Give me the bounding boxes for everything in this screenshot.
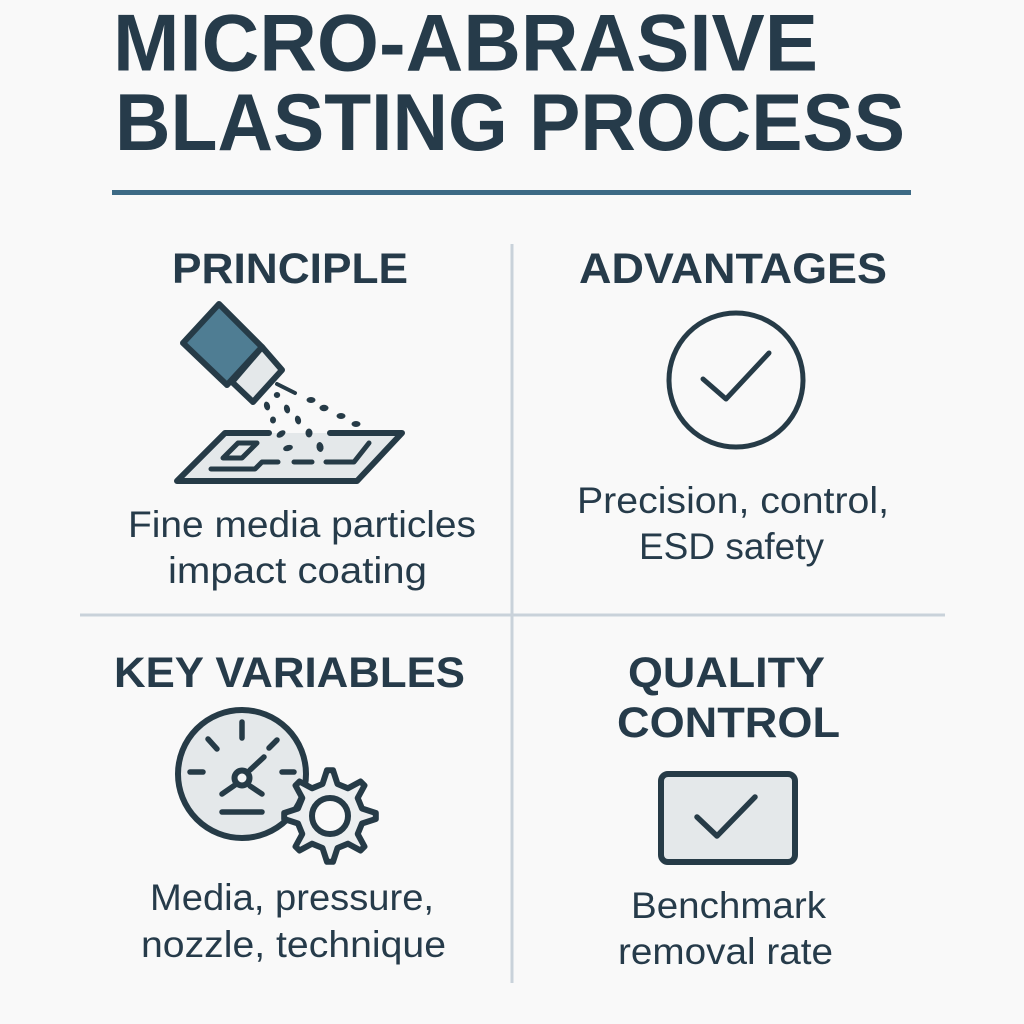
icon: check mark in circle (669, 313, 803, 447)
title: MICRO-ABRASIVE (113, 0, 818, 88)
text: key variables description: nozzle, technique (141, 924, 446, 965)
text: advantages description (577, 480, 889, 567)
text: quality control description: Benchmark (631, 885, 827, 926)
panel: quality control (617, 649, 840, 972)
panel: principle (128, 245, 476, 591)
icon: pressure gauge and gear (178, 710, 376, 862)
text: principle description (128, 504, 476, 591)
heading: quality control: QUALITY (628, 649, 825, 697)
text: key variables description (141, 877, 446, 965)
title: BLASTING PROCESS (115, 78, 905, 168)
text: advantages description: Precision, control, (577, 480, 889, 521)
title (113, 0, 905, 168)
heading: quality control: CONTROL (617, 699, 840, 747)
text: key variables description: Media, pressure, (150, 877, 434, 918)
heading: principle: PRINCIPLE (172, 245, 408, 293)
panel: key variables (114, 649, 465, 965)
icon: nozzle spraying particles onto circuit board (177, 304, 402, 481)
icon: check mark in rectangle (661, 774, 795, 862)
text: quality control description: removal rate (618, 931, 833, 972)
panel: advantages (577, 245, 889, 567)
text: quality control description (618, 885, 833, 972)
heading: quality control (617, 649, 840, 747)
heading: key variables: KEY VARIABLES (114, 649, 465, 697)
heading: advantages: ADVANTAGES (579, 245, 887, 293)
text: advantages description: ESD safety (639, 526, 824, 567)
text: principle description: Fine media particles (128, 504, 476, 545)
text: principle description: impact coating (168, 550, 427, 591)
